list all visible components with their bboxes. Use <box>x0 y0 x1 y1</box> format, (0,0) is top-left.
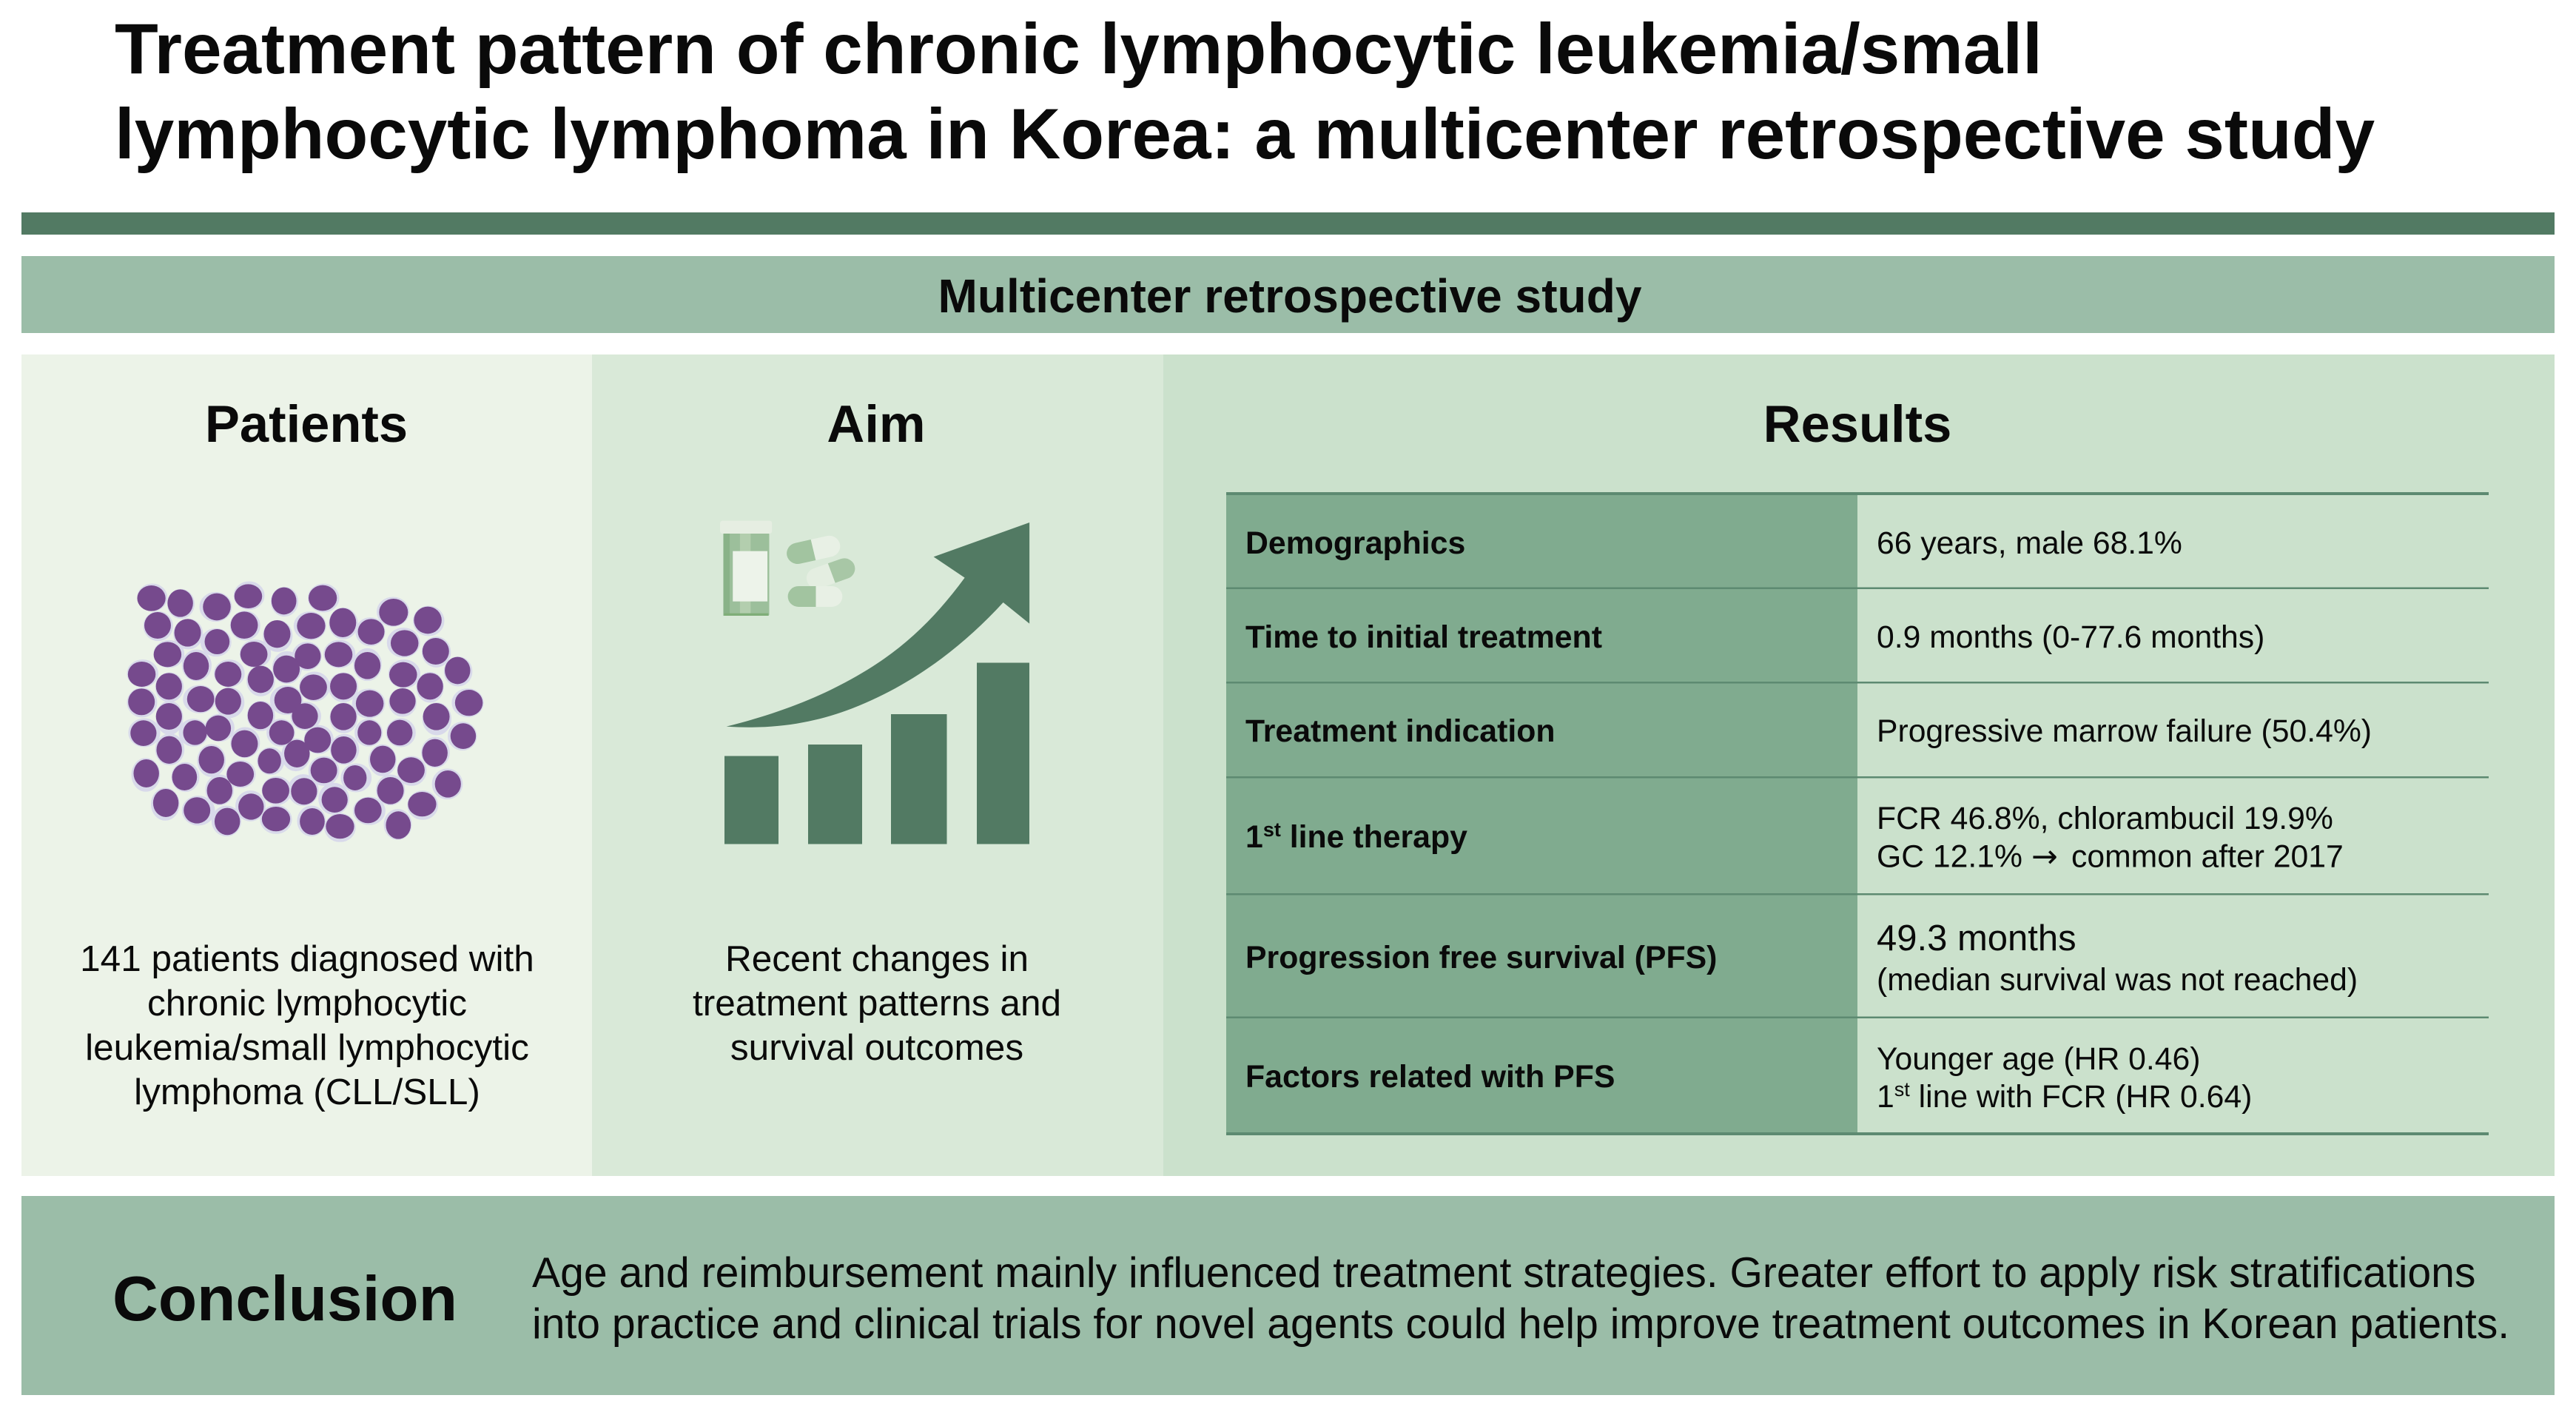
row: factors related with PFS: Younger age (HR 0.46) <box>1877 1041 2200 1077</box>
text: patients description: lymphoma (CLL/SLL) <box>134 1072 480 1112</box>
text: conclusion body: Age and reimbursement mainly influenced treatment strategies. Greater effort to apply risk stratifications <box>532 1249 2475 1297</box>
row: demographics <box>1245 525 2182 561</box>
row: first line therapy: st <box>1263 819 1281 841</box>
text: aim description: survival outcomes <box>730 1027 1023 1068</box>
title <box>115 10 2375 174</box>
text: patients description: leukemia/small lymphocytic <box>85 1027 529 1068</box>
row: progression free survival: (median survival was not reached) <box>1877 962 2358 998</box>
study type banner <box>21 256 2555 333</box>
row: demographics: 66 years, male 68.1% <box>1877 525 2182 561</box>
row: treatment indication: Treatment indication <box>1245 713 1556 749</box>
row: demographics: Demographics <box>1245 525 1465 561</box>
row: factors related with PFS: line with FCR (HR 0.64) <box>1910 1079 2252 1115</box>
bar chart with rising arrow <box>724 522 1029 844</box>
title: lymphocytic lymphoma in Korea: a multicenter retrospective study <box>115 95 2375 174</box>
text: conclusion body <box>532 1249 2509 1348</box>
panel: patients <box>21 354 592 1176</box>
row: time to initial treatment: 0.9 months (0-77.6 months) <box>1877 619 2264 655</box>
row: factors related with PFS: st <box>1894 1078 1910 1101</box>
text: conclusion body: into practice and clinical trials for novel agents could help improve treatment outcomes in Korean patients. <box>532 1300 2509 1348</box>
heading: aim: Aim <box>827 394 926 453</box>
icon: lymphocyte cells <box>127 582 483 841</box>
row: first line therapy: line therapy <box>1281 819 1467 855</box>
row: time to initial treatment <box>1245 619 2264 655</box>
panel: aim <box>592 354 1163 1176</box>
text: aim description: Recent changes in <box>725 938 1029 979</box>
icon: pill bottle and capsules <box>720 521 858 616</box>
panel: conclusion <box>21 1196 2555 1395</box>
row: first line therapy: FCR 46.8%, chlorambucil 19.9% <box>1877 801 2333 836</box>
row: first line therapy: common after 2017 <box>2071 839 2344 875</box>
panel: results <box>1163 354 2555 1176</box>
text: aim description <box>693 938 1061 1068</box>
heading: conclusion: Conclusion <box>112 1264 457 1334</box>
study type banner: Multicenter retrospective study <box>938 269 1642 323</box>
row: progression free survival: 49.3 months <box>1877 918 2076 958</box>
results table <box>1226 492 2489 1135</box>
row: treatment indication <box>1245 713 2372 749</box>
row: first line therapy: → <box>2031 838 2058 875</box>
text: patients description <box>80 938 534 1112</box>
row: progression free survival <box>1245 918 2358 998</box>
row: factors related with PFS: 1 <box>1877 1079 1894 1115</box>
heading: results: Results <box>1763 394 1951 453</box>
row: factors related with PFS: Factors related with PFS <box>1245 1059 1615 1095</box>
row: progression free survival: Progression free survival (PFS) <box>1245 940 1717 975</box>
text: patients description: chronic lymphocytic <box>147 983 467 1024</box>
row: factors related with PFS <box>1245 1041 2252 1115</box>
heading: patients: Patients <box>205 394 408 453</box>
row: first line therapy: 1 <box>1245 819 1263 855</box>
row: time to initial treatment: Time to initial treatment <box>1245 619 1602 655</box>
text: aim description: treatment patterns and <box>693 983 1061 1024</box>
row: first line therapy <box>1245 801 2344 875</box>
text: patients description: 141 patients diagnosed with <box>80 938 534 979</box>
row: first line therapy: GC 12.1% <box>1877 839 2022 875</box>
title divider bar <box>21 212 2555 235</box>
title: Treatment pattern of chronic lymphocytic leukemia/small <box>115 10 2042 89</box>
row: treatment indication: Progressive marrow failure (50.4%) <box>1877 713 2372 749</box>
